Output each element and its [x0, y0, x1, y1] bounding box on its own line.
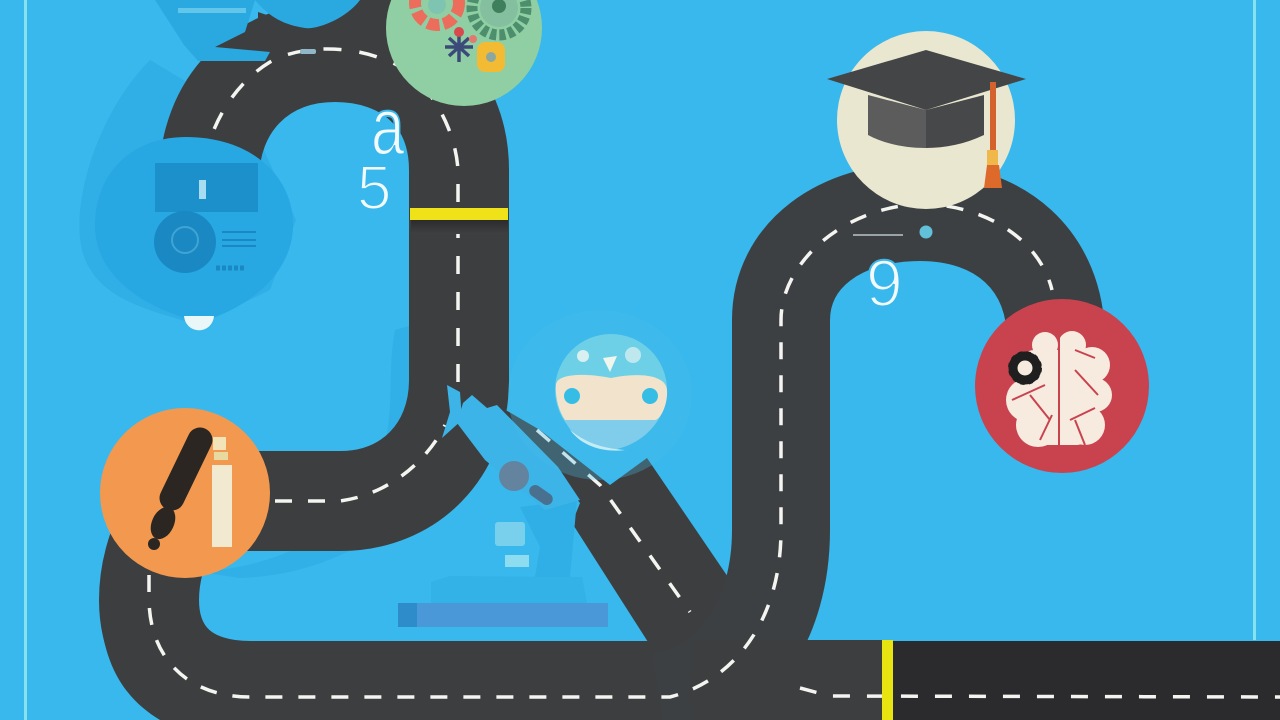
road: bottom straight section — [690, 640, 1280, 720]
lane dashes — [149, 49, 1280, 697]
yellow line on vertical road — [410, 208, 508, 220]
circle: gears on green — [386, 0, 542, 106]
small marker on right arch — [853, 226, 932, 238]
road: broken top edge — [214, 0, 420, 70]
road: left winding section — [149, 52, 760, 691]
icon: microscope — [398, 385, 608, 627]
circle: graduation cap — [827, 31, 1026, 209]
faded blue shadow behind lower-left road — [200, 320, 430, 578]
number: 9: 9 — [866, 246, 903, 320]
circle: flask bubble — [508, 310, 692, 480]
road: right arch section — [660, 212, 1056, 702]
yellow line on bottom road — [882, 640, 893, 720]
number: a: a — [371, 81, 405, 172]
number: 5: 5 — [357, 154, 391, 223]
shadow under yellow line — [411, 220, 508, 234]
road: bottom-left outer corner fill — [102, 630, 220, 720]
icon: top blue vessel neck — [155, 0, 360, 61]
icon: blue bulb — [95, 137, 293, 330]
circle: orange pen and tube — [100, 408, 270, 578]
circle: brain with gear — [975, 299, 1149, 473]
faded halo of blue bulb — [79, 60, 296, 325]
road: diagonal section — [497, 405, 735, 642]
